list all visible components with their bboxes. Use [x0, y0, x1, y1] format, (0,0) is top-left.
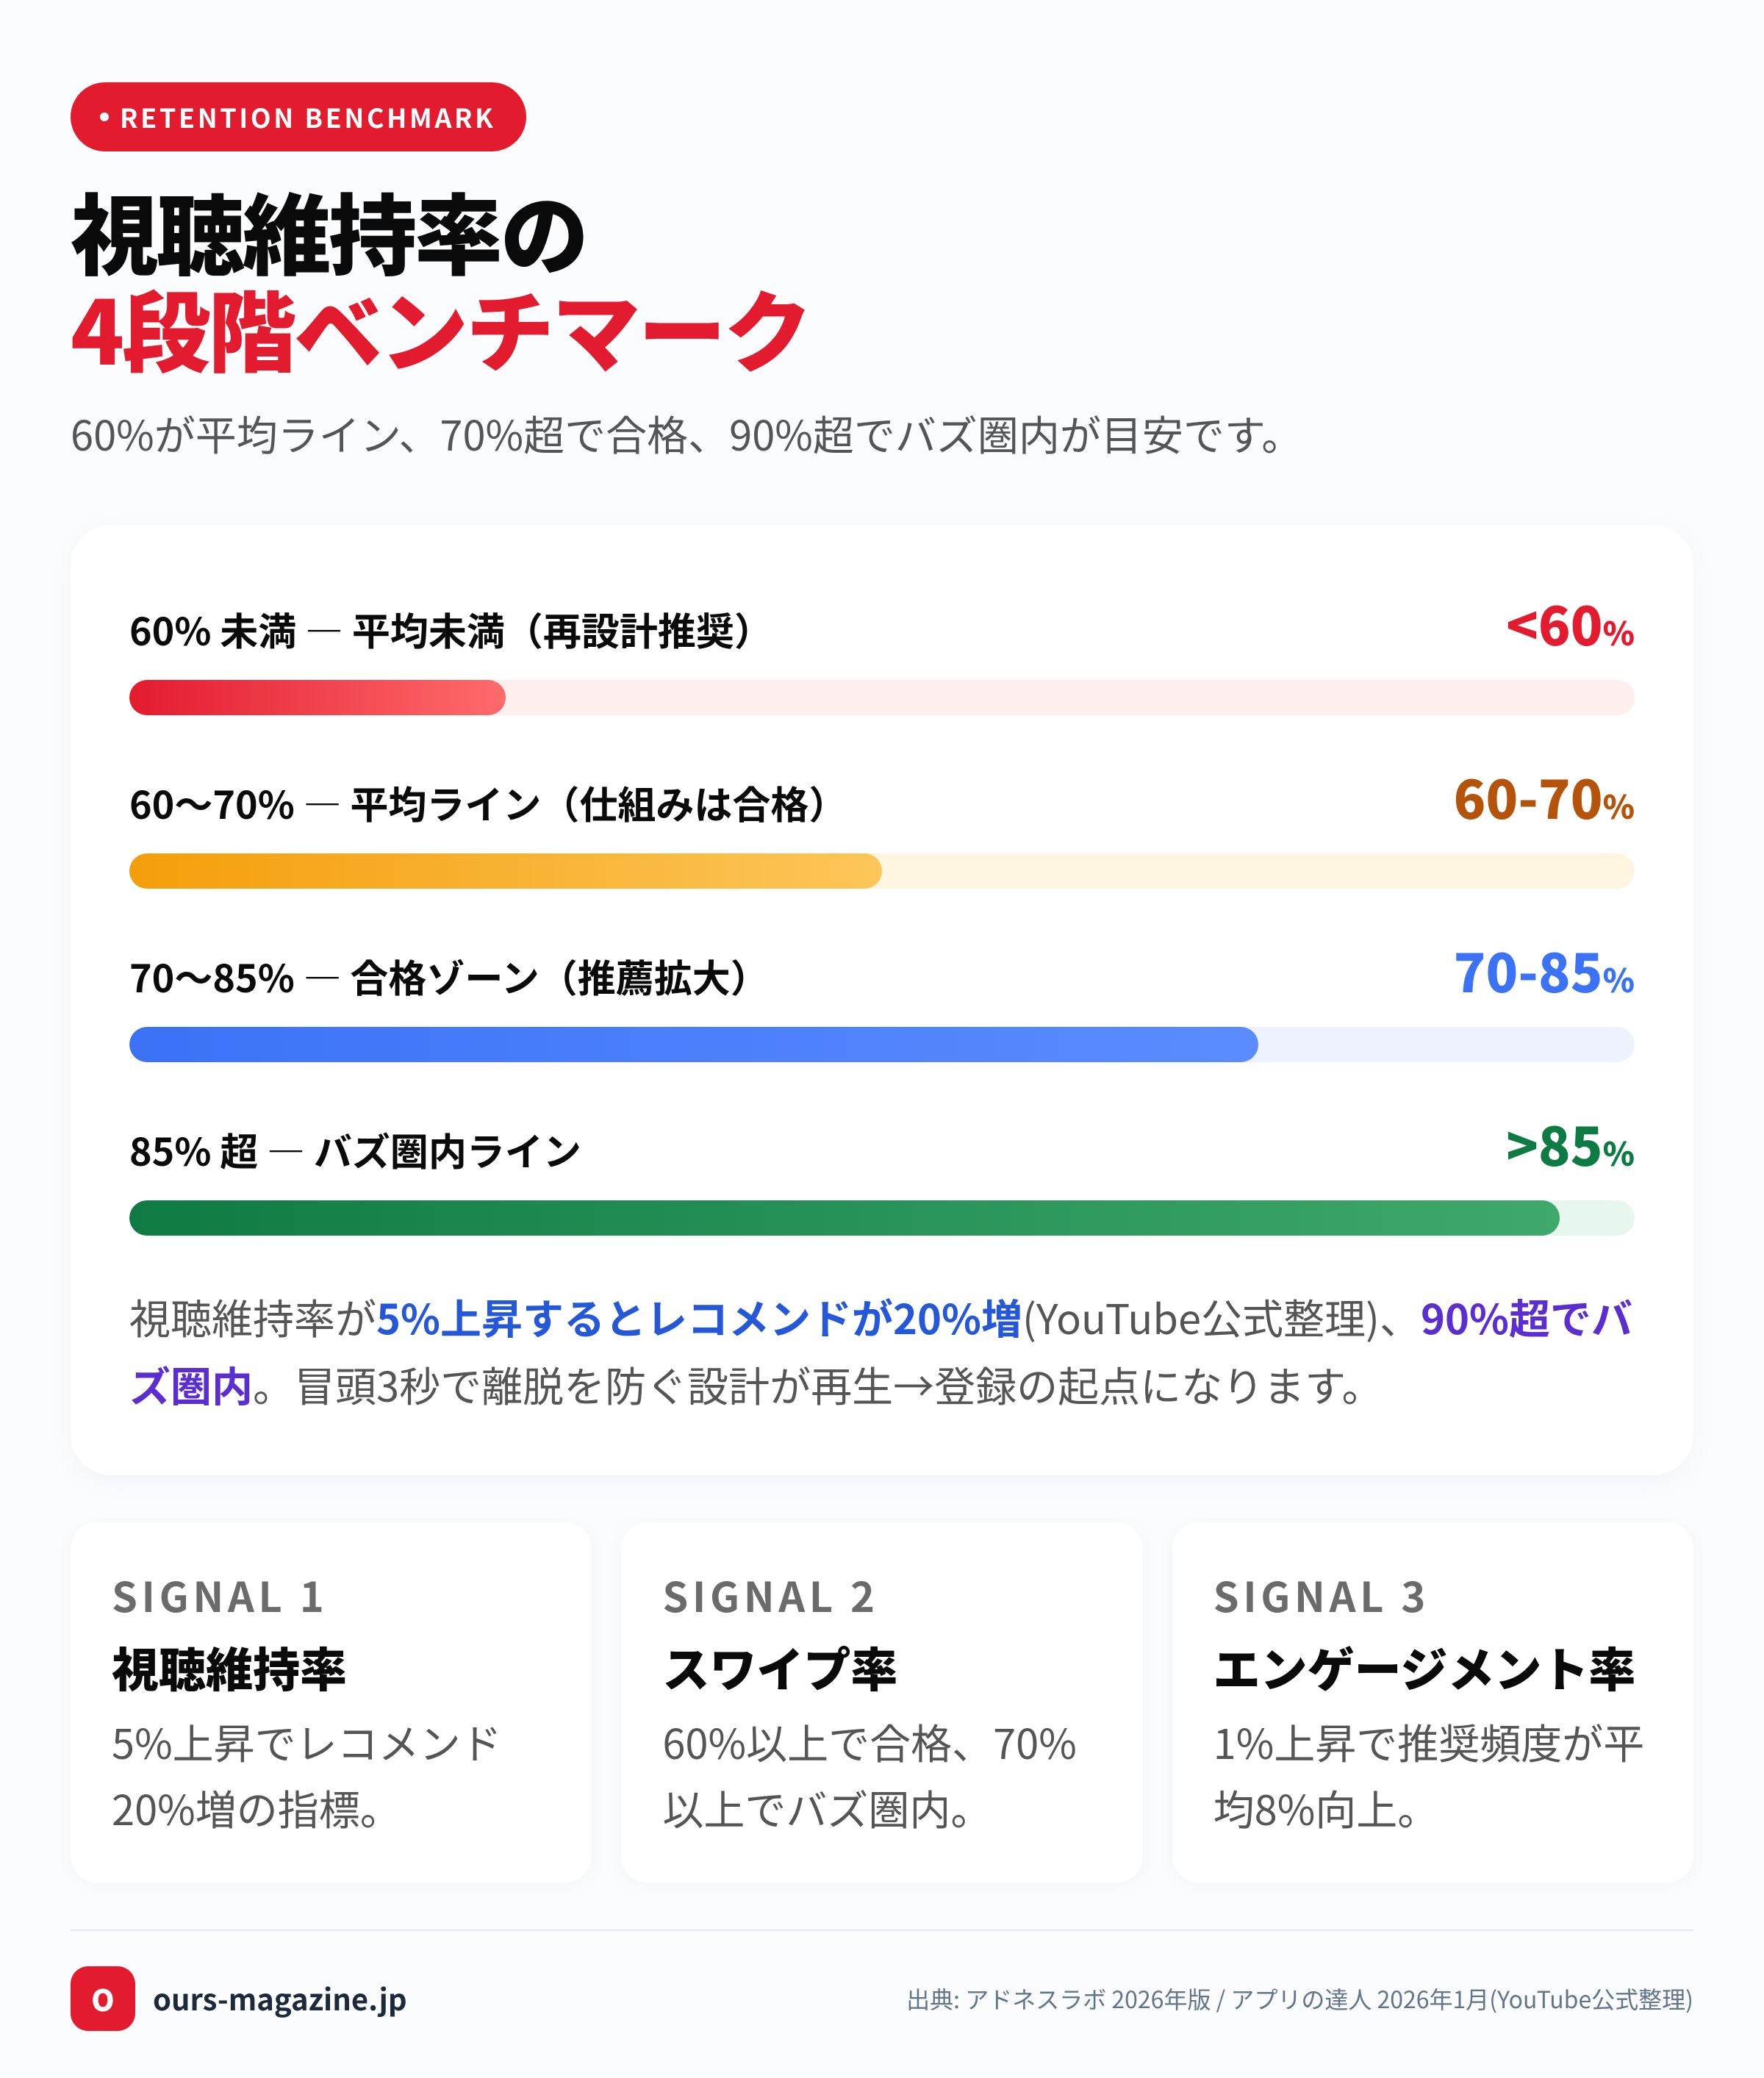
- signal 2 description: [662, 1712, 1077, 1838]
- signal 3 description: [1213, 1712, 1644, 1838]
- label: under 60: 60% 未満 — 平均未満（再設計推奨）: [129, 601, 772, 656]
- panel: signal 3: [1172, 1522, 1693, 1882]
- signal 3 description: 均8%向上。: [1213, 1778, 1438, 1838]
- site name: ours-magazine.jp: [153, 1977, 407, 2019]
- panel: benchmark bars: [71, 525, 1693, 1475]
- panel: signal 2: [621, 1522, 1143, 1882]
- signal 2 description: 以上でバズ圏内。: [662, 1778, 992, 1838]
- signal 2 description: 60%以上で合格、70%: [662, 1712, 1077, 1771]
- label: over 85: 85% 超 — バズ圏内ライン: [129, 1122, 581, 1177]
- signal 1 description: [112, 1712, 502, 1838]
- title: 4段階ベンチマーク: [71, 262, 810, 390]
- signal 3 label: SIGNAL 3: [1213, 1565, 1430, 1624]
- bar: under 60: [129, 680, 1635, 715]
- badge: retention benchmark: [71, 82, 526, 151]
- badge: retention benchmark: RETENTION BENCHMARK: [120, 98, 495, 136]
- icon: logo: [71, 1966, 135, 2031]
- bar: 60 to 70: [129, 853, 1635, 889]
- label: 70 to 85: 70〜85% — 合格ゾーン（推薦拡大）: [129, 948, 769, 1003]
- signal 3 title: エンゲージメント率: [1213, 1633, 1635, 1701]
- value: over 85: >85%: [1506, 1104, 1635, 1181]
- value: under 60: <60%: [1506, 584, 1635, 661]
- signal 1 title: 視聴維持率: [112, 1633, 347, 1701]
- note text: [129, 1287, 1632, 1414]
- bar: 70 to 85: [129, 1027, 1635, 1062]
- signal 2 label: SIGNAL 2: [662, 1565, 879, 1624]
- note text: 視聴維持率が5%上昇するとレコメンドが20%増(YouTube公式整理)、90%超でバ: [129, 1287, 1632, 1347]
- title: 視聴維持率の: [71, 165, 587, 293]
- signal 1 label: SIGNAL 1: [112, 1565, 328, 1624]
- note text: ズ圏内。冒頭3秒で離脱を防ぐ設計が再生→登録の起点になります。: [129, 1355, 1383, 1414]
- bar: over 85: [129, 1200, 1635, 1236]
- panel: signal 1: [71, 1522, 592, 1882]
- icon: logo: O: [91, 1977, 115, 2020]
- title: [71, 165, 810, 390]
- subtitle: 60%が平均ライン、70%超で合格、90%超でバズ圏内が目安です。: [71, 404, 1302, 463]
- signal 1 description: 5%上昇でレコメンド: [112, 1712, 502, 1771]
- value: 70 to 85: 70-85%: [1454, 931, 1635, 1008]
- value: 60 to 70: 60-70%: [1454, 757, 1635, 834]
- signal 2 title: スワイプ率: [662, 1633, 897, 1701]
- signal 1 description: 20%増の指標。: [112, 1778, 401, 1838]
- signal 3 description: 1%上昇で推奨頻度が平: [1213, 1712, 1644, 1771]
- source: 出典: アドネスラボ 2026年版 / アプリの達人 2026年1月(YouTube公式整理): [906, 1982, 1693, 2016]
- label: 60 to 70: 60〜70% — 平均ライン（仕組みは合格）: [129, 775, 847, 830]
